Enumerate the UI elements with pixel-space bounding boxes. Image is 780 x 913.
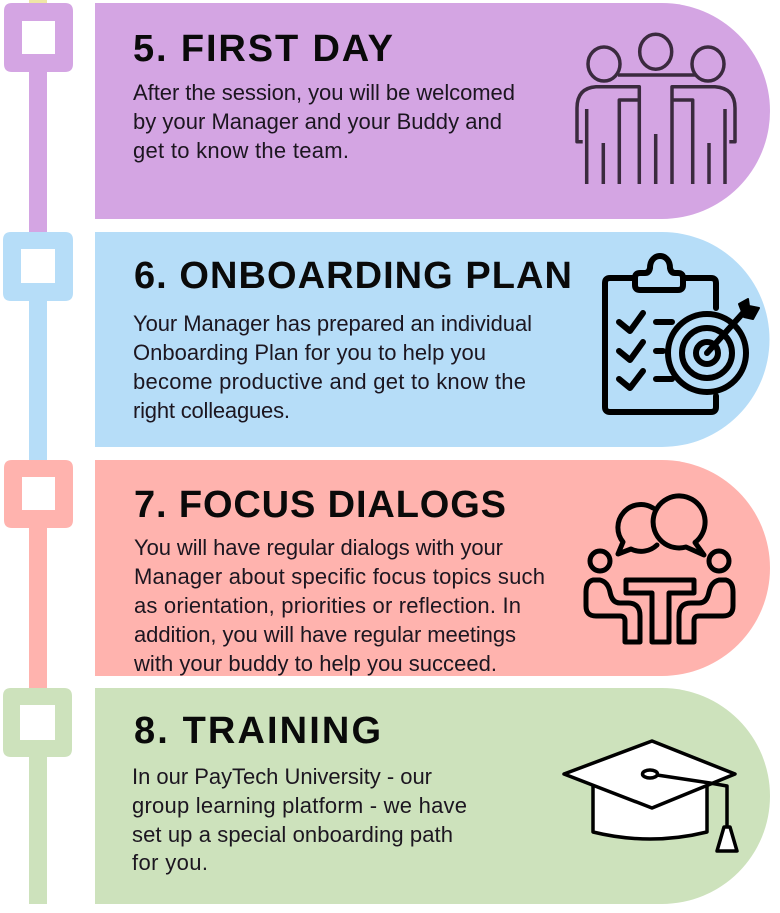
panel: step 6 onboarding plan [95, 232, 770, 447]
text block: focus dialogs description: with your buddy to help you succeed. [133, 651, 497, 676]
panel: step 8 training [95, 688, 770, 904]
timeline step 6 [3, 232, 73, 462]
icon: graduation cap [564, 741, 737, 851]
text block: onboarding plan description: Onboarding Plan for you to help you [133, 340, 486, 365]
text block: onboarding plan description: Your Manager has prepared an individual [133, 311, 532, 336]
heading: 5. first day: 5. FIRST DAY [133, 28, 393, 70]
text block: focus dialogs description: Manager about specific focus topics such [134, 564, 545, 589]
icon: team of three people [577, 34, 735, 184]
text block: focus dialogs description [133, 535, 545, 676]
heading: 6. onboarding plan: 6. ONBOARDING PLAN [134, 255, 572, 297]
text block: focus dialogs description: as orientation, priorities or reflection. In [134, 593, 521, 618]
panel: step 7 focus dialogs [95, 460, 770, 676]
text block: training description: set up a special onboarding path [132, 822, 453, 847]
text block: focus dialogs description: addition, you will have regular meetings [134, 622, 516, 647]
text block: onboarding plan description: right colleagues. [133, 398, 290, 423]
heading: 7. focus dialogs: 7. FOCUS DIALOGS [134, 484, 506, 526]
icon: clipboard with checklist and target [605, 256, 759, 412]
timeline step 7 [4, 460, 73, 690]
icon: two people talking at a table [586, 496, 733, 642]
text block: training description: for you. [132, 850, 208, 875]
timeline: previous step stub [29, 0, 47, 4]
text block: training description: In our PayTech University - our [132, 764, 432, 789]
text block: first day description: After the session, you will be welcomed [133, 80, 515, 105]
text block: first day description: by your Manager and your Buddy and [133, 109, 502, 134]
text block: training description [132, 764, 467, 875]
timeline step 5 [4, 3, 73, 234]
text block: first day description [133, 80, 515, 163]
timeline step 8 [3, 688, 72, 904]
heading: 8. training: 8. TRAINING [134, 710, 381, 752]
text block: focus dialogs description: You will have regular dialogs with your [134, 535, 503, 560]
panel: step 5 first day [95, 3, 770, 219]
text block: onboarding plan description [133, 311, 532, 423]
text block: training description: group learning platform - we have [132, 793, 467, 818]
text block: onboarding plan description: become productive and get to know the [133, 369, 526, 394]
text block: first day description: get to know the team. [133, 138, 349, 163]
